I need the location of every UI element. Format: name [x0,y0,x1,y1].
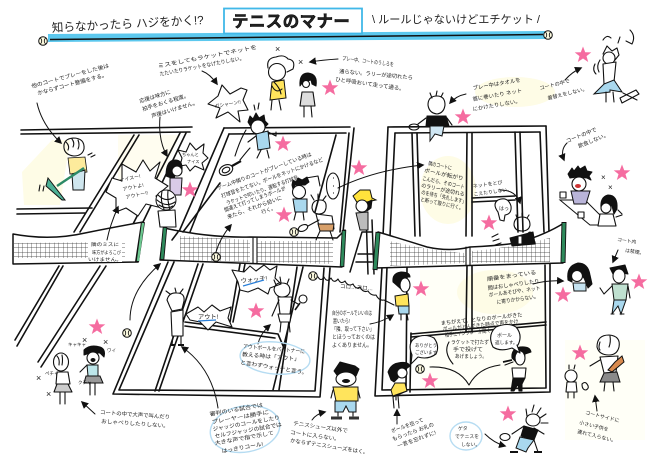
figure: girl in yellow dress [268,44,294,110]
note: court maintenance: 他のコートでプレーをした後は [30,61,110,90]
note: centre court noise: 行く。 [260,204,277,216]
note: towels on net [472,76,523,113]
note: no shouting [100,408,170,430]
panel: centre court [113,127,354,397]
note: returning stray balls [440,310,523,339]
note: towels on net: 首に巻いたり ネット [472,86,523,103]
note: cheering etiquette [138,88,199,120]
figure: player sending the ball back [503,347,531,391]
burst: small shout [178,143,208,171]
figure: boy eating on a mat: × [601,173,606,182]
note: out ball call [240,342,308,377]
note: own ball: 「隣、取って下さい」 [332,325,374,333]
note: court maintenance: かならずコート整備をする。 [36,71,108,97]
net: centre court [160,227,345,267]
figure: boy in blue shirt [292,176,320,220]
panel: right court [375,126,550,396]
net: right court [375,222,564,270]
note: waiting in line: 順番をまっている [486,269,537,283]
bouncing ball and speech bubbles: 返します。 [495,339,518,346]
note: say thank you: もらったら お礼の [391,420,435,443]
figure: boy sweeping the court [39,138,95,200]
highlight: pale yellow marker wash [22,77,645,440]
note: ball rolls into next court: のを待ち「失礼します」 [421,188,467,206]
note: towels on net: にかけたりしない。 [472,98,521,113]
burst: cheering shout: アウトー!! [125,189,149,201]
note: ball rolls into next court: のラリーが途切れる [421,181,465,198]
panel: left court [15,127,192,367]
umpire chair [350,212,374,274]
note: cheering etiquette: 応援は味方に [138,88,172,105]
figure: man smoking [600,265,630,314]
note: no geta: でテニスを [455,433,479,440]
figure: dark-haired girl: × [298,57,303,67]
note: centre court noise: 来たら、それから拾いに [226,194,283,221]
note: line call: 審判のいる試合では [209,401,264,418]
figure: two chatting girls: ワイ [107,348,116,353]
figure: boy eating on a mat: × [608,183,613,192]
note: no jumping the net: ネットをとび [472,179,503,190]
figure: player calling out [166,288,184,345]
figure: two chatting girls: × [103,337,108,347]
note: line call: プレーヤーは勝手に [211,408,269,426]
note: no small children: 連れて入らない。 [577,428,617,445]
figure: dark-haired girl [298,57,338,117]
title box [224,8,362,34]
note: centre court noise [216,150,325,221]
burst: watch call: ウォッチ! [240,274,268,285]
note: cheering etiquette: 声援はいけません。 [150,98,199,120]
note: no small children: コートサイドに [585,410,620,424]
burst: out call [186,305,232,330]
burst: watch call [232,265,281,294]
heading: right tagline: \ ルールじゃないけどエチケット / [372,13,541,26]
note: ball rolls into next court: と断って取りに行く。 [420,195,464,212]
note: line call: セルフジャッジの試合では [214,420,283,440]
note: centre court noise: 打球音をたてない。ボールをネットにかけるなど [220,155,325,200]
note: no changing on court [539,77,588,102]
figure: boy eating on a mat [560,166,613,225]
note: no eating on court: 飲食しない。 [577,130,610,150]
note: towels on net: プレー中はタオルを [472,76,521,92]
figure: player caught at the net: はっ [499,206,509,212]
note: waiting in line [486,269,541,306]
note: walking behind courts [335,54,413,93]
note: no shouting: コートの中で大声で叫んだり [100,408,170,421]
net: left court: 隣のミスに [91,241,119,248]
note: ball rolls into next court: ボールが転がり [424,166,464,182]
note: ball rolls into next court: こんだら、そのコート [422,175,465,191]
note: ball rolls into next court: 隣のコートに [428,159,453,172]
figure: spectator back view [156,190,176,227]
note: court maintenance [30,61,110,97]
note: hand the ball back: ラケットで打たず [451,339,489,346]
net: left court: 味方がよろこび [92,249,121,256]
bouncing ball and speech bubbles: ありがとう [415,342,437,349]
bouncing ball and speech bubbles: ございます [415,349,438,356]
note: waiting in line: ボールあそびや、ネット [488,284,541,299]
figure: laughing man in geta [331,362,360,418]
note: ball rolls into next court [420,159,467,212]
note: walking behind courts: プレー中、コートのうしろを [342,54,394,68]
figure: player caught at the net [492,199,535,246]
burst: cheering shout [106,160,168,216]
note: no shouting: おしゃべりしたりしない。 [101,418,169,430]
net: left court: いけません。 [88,257,122,263]
note: hand the ball back: あげましょう。 [455,353,487,360]
note: returning stray balls: まちがえて、となりのボールがきた [440,310,523,327]
note: centre court noise: ラケットで叩いたり、運転する打球音 [225,173,300,207]
note: say thank you: ボールを拾って [390,416,425,435]
note: line call [209,401,283,455]
note: say thank you [390,416,438,450]
note: no smoking: は禁煙。 [625,247,645,257]
figure: two chatting girls: クチャ [78,380,91,386]
note: tennis shoes: コートに入らない。 [290,429,340,443]
bouncing ball and speech bubbles [410,324,520,385]
figure: girl thanking [388,362,410,408]
burst: small shout: ナイス [187,159,199,165]
note: no eating on court: コートの中で [565,125,598,145]
note: line call: ジャッジのコールをしたり [212,414,280,433]
net: left court [13,222,143,264]
note: tennis shoes [290,419,369,456]
note: no eating on court [565,125,610,150]
burst: cheering shout: ナイスー! [119,174,141,184]
note: returning stray balls: 相手にインプレーか聞く [444,326,491,339]
note: centre court noise: ゲーム中隣りのコートがプレーしている時は [216,150,313,192]
burst: racket bang [208,85,248,122]
note: own ball [332,309,376,349]
note: tennis shoes: かならずテニスシューズをはく。 [290,436,369,456]
figure: angry boy hit by racket [248,103,276,158]
note: tennis shoes: テニスシューズ以外で [293,419,348,435]
note: own ball: 置いたら! [333,318,350,325]
rolling ball trail [309,272,394,305]
burst: cheering shout: アウトよ! [122,182,144,193]
note: no smoking: コート内 [617,236,637,246]
note: do not bang racket [157,44,258,78]
note: own ball: よくありません。 [332,342,372,349]
figure: girl eating [598,195,622,226]
note: cheering etiquette: 拍手をおくる程度。 [141,91,190,113]
note: no changing on court: 着替えをしない。 [547,85,588,102]
note: out ball call: 教える時は「アウト」 [242,350,300,363]
note: no geta [455,425,480,448]
thrown racket with motion lines [172,130,250,240]
figure: two chatting girls [36,335,116,404]
figure: player saying watch [272,277,307,332]
burst: racket bang: ガシャーン!! [214,98,241,110]
note: waiting in line: に寄りかからない。 [496,292,539,306]
figure: player with rolling ball [393,272,410,320]
burst: out call: アウト! [198,313,219,321]
figure: umpire in yellow hat [353,190,376,230]
figure: two chatting girls: × [82,335,87,345]
note: line call: はっきりコール! [221,441,264,455]
arrows [37,68,618,446]
note: do not bang racket: たたいたりラケットをなげたりしない。 [159,54,245,78]
note ellipses: blue marker outlines [207,339,482,458]
note: hand the ball back [451,339,489,360]
figure: player returning at the net [290,194,334,240]
note: own ball: とほうっておくのは [332,334,376,341]
note: walking behind courts: ひと呼吸おいて走って通る。 [335,75,405,93]
burst: small shout: ちゃんと [182,152,199,158]
note: no geta: ゲタ [458,425,468,432]
figure: girl in yellow dress: × [275,44,280,54]
note: out ball call: アウトボールをパートナーに [243,342,305,355]
note: walking behind courts: 通らない。ラリーが途切れたら [339,67,413,81]
figure: two chatting girls: ペチャ [45,371,58,376]
heading: left tagline: 知らなかったら ハジをかく!? [51,13,204,35]
figure: woman cheering [166,160,182,195]
figure: two chatting girls: キャキャ [68,342,86,347]
figure: player in geta [500,405,548,452]
note: centre court noise: 間違えて打ってしまうボールが [223,184,287,214]
figure: two chatting girls: × [46,389,51,399]
figure: two chatting girls: × [36,373,41,383]
note: no geta: しない。 [461,441,480,448]
note: no small children [577,410,620,445]
bouncing ball and speech bubbles: ボール [497,332,512,339]
thought bubble with dots linked to the next-court note [326,165,423,199]
title box: テニスのマナー [232,13,350,31]
note: no small children: 小さい子供を [579,419,609,433]
note: no changing on court: コートの中で [539,77,571,92]
pink stars [89,46,647,421]
note: hand the ball back: 手で投げて [453,346,483,353]
note: line call: 大きな声で指で示して [214,429,274,447]
figure: person changing clothes [594,30,639,103]
heading underline: blue marker band with tennis balls [39,31,552,45]
note: waiting in line: 間はおしゃべりしたり [487,278,540,292]
note: do not bang racket: ミスをしてもラケットでネットを [157,44,258,70]
note: no jumping the net: こえたりしない。 [473,186,512,198]
rolling ball trail: コロ…コロ… [340,283,373,292]
note: out ball call: と言わずウォッチと言う。 [240,358,308,377]
note: no smoking [617,236,645,257]
note: returning stray balls: ボールがとんできた時点で声をかけ [442,317,519,333]
note: own ball: 自分のボールでいいのは [332,309,372,317]
note: say thank you: 一言を忘れずに! [396,428,438,450]
figure: mother and child [565,335,624,398]
note: no jumping the net [472,179,512,198]
figure: player sitting on the line [409,91,466,141]
figure: long-haired girl waiting [568,263,592,291]
